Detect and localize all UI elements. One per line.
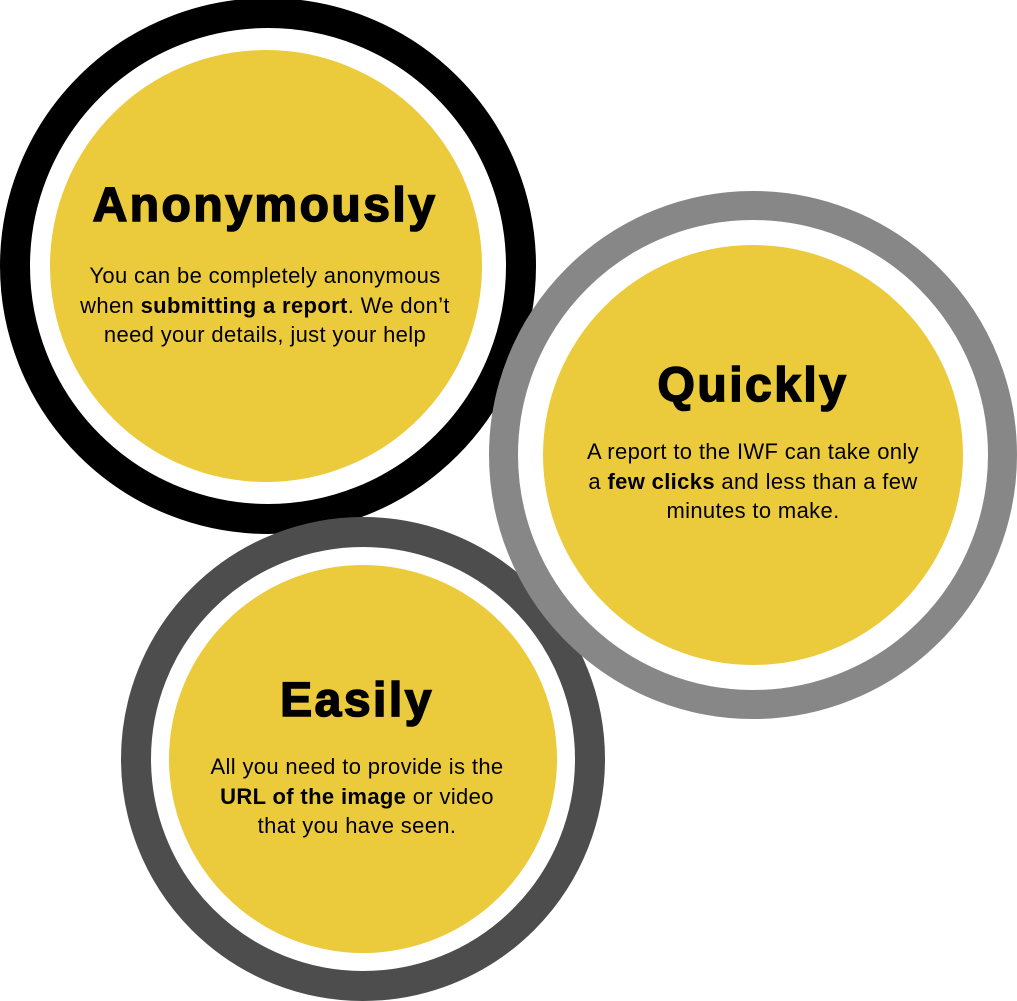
heading: Easily: Easily <box>280 674 434 727</box>
circle: quickly <box>489 191 1017 719</box>
text: easily body: that you have seen. <box>258 813 456 838</box>
circle: anonymously <box>0 0 536 534</box>
text: quickly body: a few clicks and less than a few <box>588 468 918 494</box>
heading: Anonymously: Anonymously <box>93 179 437 232</box>
text: quickly body: A report to the IWF can take only <box>587 439 919 464</box>
text: anonymously body: when submitting a report. We don’t <box>80 292 450 318</box>
text: quickly body <box>587 439 919 523</box>
text: easily body <box>210 754 504 838</box>
text: easily body: URL of the image or video <box>220 784 494 808</box>
circle: easily <box>121 517 605 1001</box>
text: quickly body: minutes to make. <box>666 498 840 523</box>
text: anonymously body: need your details, just your help <box>104 322 426 347</box>
text: easily body: All you need to provide is the <box>210 754 504 779</box>
heading: Quickly: Quickly <box>658 359 848 412</box>
text: anonymously body <box>80 263 450 347</box>
text: anonymously body: You can be completely anonymous <box>89 263 441 288</box>
